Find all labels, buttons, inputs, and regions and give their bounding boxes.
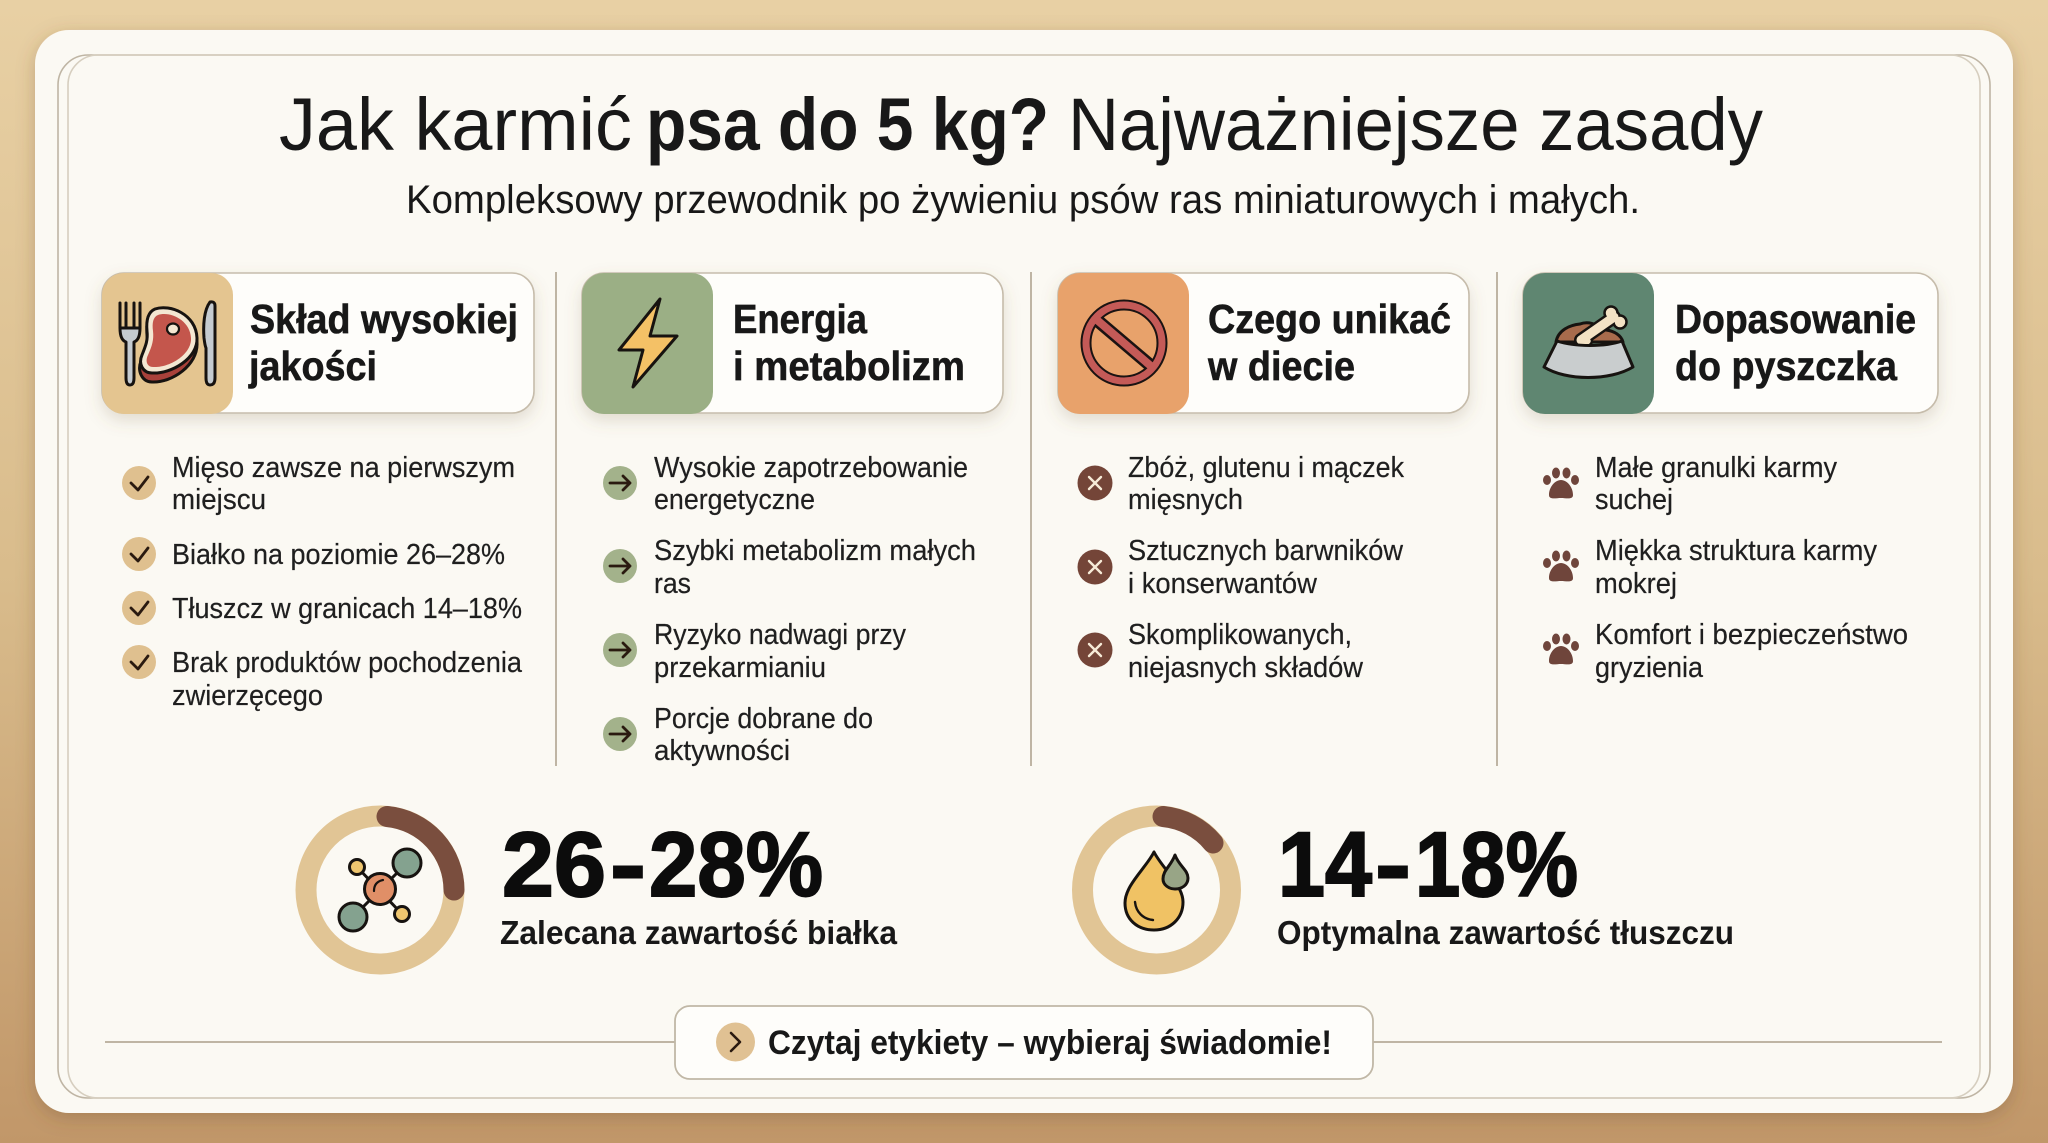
icon: prohibition sign <box>1086 305 1162 381</box>
panel: energia i metabolizm <box>582 273 1003 767</box>
item: komfort: gryzienia <box>1595 652 1703 684</box>
item: miękka struktura: mokrej <box>1595 568 1677 600</box>
item: mięso: Mięso zawsze na pierwszym <box>172 452 515 484</box>
item: nadwaga: przekarmianiu <box>654 652 826 684</box>
heading <box>248 296 518 389</box>
icon: oil drops <box>1125 852 1188 930</box>
item: komfort <box>1543 619 1908 684</box>
icon: chevron <box>716 1022 755 1062</box>
panel: czego unikać <box>1058 273 1469 684</box>
heading <box>733 296 965 389</box>
value: - <box>610 814 646 916</box>
heading: Energia <box>733 296 868 342</box>
item: tłuszcz: Tłuszcz w granicach 14–18% <box>172 593 522 625</box>
panel: skład wysokiej jakości <box>102 273 534 712</box>
item: skomplikowane składy: Skomplikowanych, <box>1128 619 1352 651</box>
stat: tłuszcz <box>1082 814 1734 964</box>
icon: bowl with bone <box>1544 306 1633 378</box>
value: 14 <box>1278 814 1372 916</box>
item: zapotrzebowanie <box>603 452 968 516</box>
item: metabolizm: ras <box>654 568 691 600</box>
item: porcje <box>603 703 873 767</box>
item: barwniki: Sztucznych barwników <box>1128 535 1403 567</box>
label: Optymalna zawartość tłuszczu <box>1277 914 1734 951</box>
heading: Skład wysokiej <box>250 296 518 342</box>
item: zbóż: mięsnych <box>1128 484 1243 516</box>
item: skomplikowane składy <box>1078 619 1363 684</box>
item: brak produktów: zwierzęcego <box>172 680 323 712</box>
icon: fork, steak and knife <box>120 302 215 385</box>
icon: lightning bolt <box>619 299 677 387</box>
title: Jak karmić <box>279 83 632 166</box>
item: zapotrzebowanie: Wysokie zapotrzebowanie <box>654 452 968 484</box>
item: białko: Białko na poziomie 26–28% <box>172 539 505 571</box>
icon: paw <box>1543 634 1579 664</box>
column dividers <box>556 272 1497 766</box>
item: mięso <box>122 452 515 516</box>
header card <box>102 273 534 414</box>
footer rules <box>105 1041 1942 1043</box>
item: miękka struktura: Miękka struktura karmy <box>1595 535 1878 567</box>
icon: paw <box>1543 550 1579 581</box>
header card <box>1523 273 1938 414</box>
callout text: Czytaj etykiety – wybieraj świadomie! <box>768 1024 1332 1062</box>
stat: białko <box>306 814 898 964</box>
panel: dopasowanie do pyszczka <box>1523 273 1938 684</box>
heading: Czego unikać <box>1208 296 1451 342</box>
item: zbóż <box>1078 452 1405 516</box>
title: Najważniejsze zasady <box>1068 83 1763 166</box>
header card <box>582 273 1003 414</box>
icon: paw <box>1543 468 1579 498</box>
header card <box>1058 273 1469 414</box>
label: Zalecana zawartość białka <box>500 914 898 951</box>
item: granulki: Małe granulki karmy <box>1595 452 1838 484</box>
heading <box>1675 296 1916 389</box>
callout <box>675 1006 1373 1079</box>
donut chart: protein <box>306 816 454 964</box>
item: miękka struktura <box>1543 535 1878 600</box>
item: barwniki: i konserwantów <box>1128 568 1317 600</box>
heading: jakości <box>248 343 377 389</box>
donut chart: fat <box>1082 816 1230 964</box>
item: metabolizm <box>603 535 976 600</box>
item: komfort: Komfort i bezpieczeństwo <box>1595 619 1908 651</box>
subtitle: Kompleksowy przewodnik po żywieniu psów ras miniaturowych i małych. <box>406 178 1640 222</box>
heading: do pyszczka <box>1675 343 1898 389</box>
icon: molecule <box>339 849 421 931</box>
value <box>1278 814 1578 916</box>
heading: i metabolizm <box>733 343 965 389</box>
item: nadwaga <box>603 619 907 684</box>
item: granulki: suchej <box>1595 484 1673 516</box>
heading: Dopasowanie <box>1675 296 1916 342</box>
item: brak produktów: Brak produktów pochodzenia <box>172 647 522 679</box>
item: porcje: aktywności <box>654 735 790 767</box>
value <box>502 814 823 916</box>
value: 18% <box>1415 814 1578 916</box>
item: metabolizm: Szybki metabolizm małych <box>654 535 976 567</box>
item: zbóż: Zbóż, glutenu i mączek <box>1128 452 1405 484</box>
item: zapotrzebowanie: energetyczne <box>654 484 815 516</box>
item: brak produktów <box>122 645 522 712</box>
value: 28% <box>649 814 823 916</box>
item: granulki <box>1543 452 1838 516</box>
title: psa do 5 kg? <box>646 83 1049 166</box>
heading: w diecie <box>1207 343 1355 389</box>
value: - <box>1375 814 1411 916</box>
value: 26 <box>502 814 606 916</box>
item: mięso: miejscu <box>172 484 266 516</box>
item: barwniki <box>1078 535 1403 600</box>
heading <box>1207 296 1451 389</box>
title <box>279 83 1763 166</box>
item: skomplikowane składy: niejasnych składów <box>1128 652 1363 684</box>
item: porcje: Porcje dobrane do <box>654 703 873 735</box>
item: nadwaga: Ryzyko nadwagi przy <box>654 619 907 651</box>
